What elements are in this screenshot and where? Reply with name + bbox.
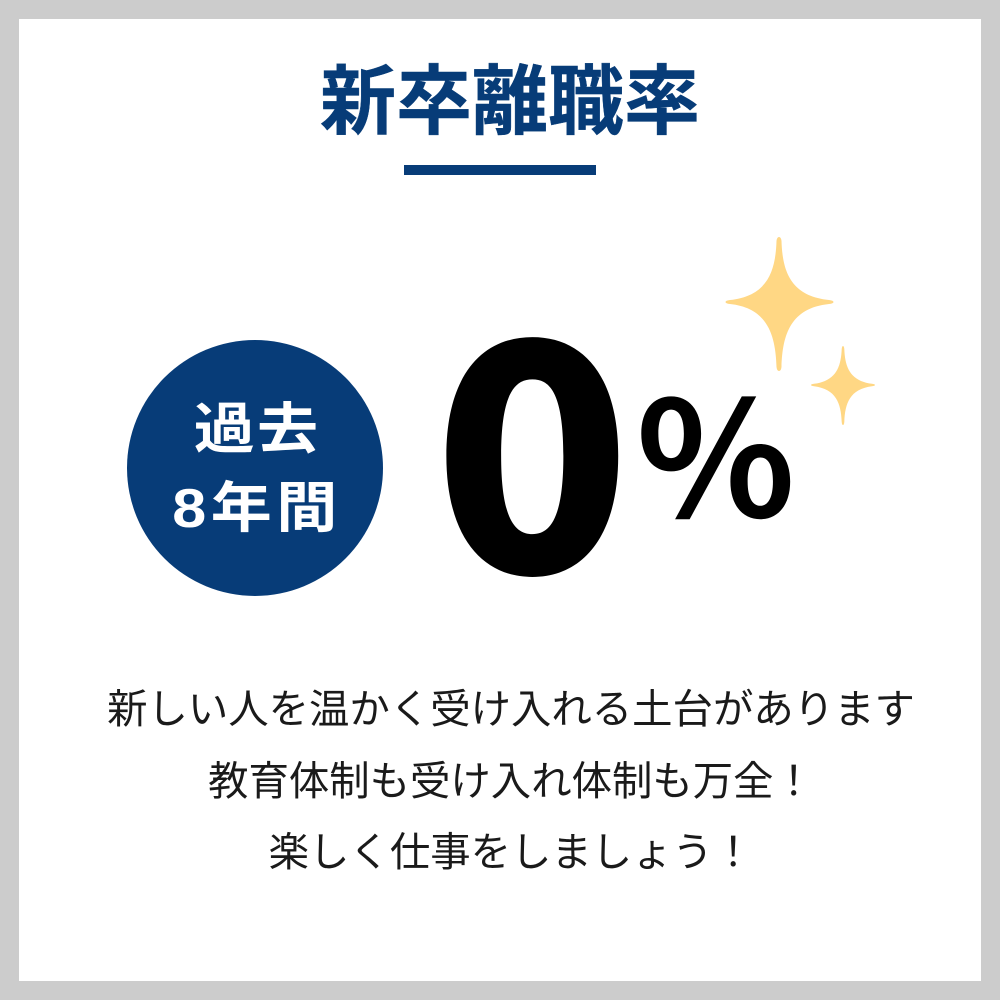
title underline (404, 165, 596, 175)
body line 1: 新しい人を温かく受け入れる土台があります (107, 686, 915, 732)
small sparkle (811, 346, 875, 425)
title: 新卒離職率 (320, 60, 700, 145)
badge line 2: 8年間 (172, 477, 342, 539)
body text (107, 686, 915, 875)
large sparkle (726, 237, 834, 371)
body line 3: 楽しく仕事をしましょう！ (269, 829, 753, 875)
big number 0: 0 (433, 212, 632, 662)
percent sign: % (636, 332, 795, 564)
icon: sparkles (726, 237, 875, 425)
badge: past 8 years (127, 340, 383, 596)
badge line 1: 過去 (194, 398, 320, 460)
body line 2: 教育体制も受け入れ体制も万全！ (208, 758, 814, 804)
